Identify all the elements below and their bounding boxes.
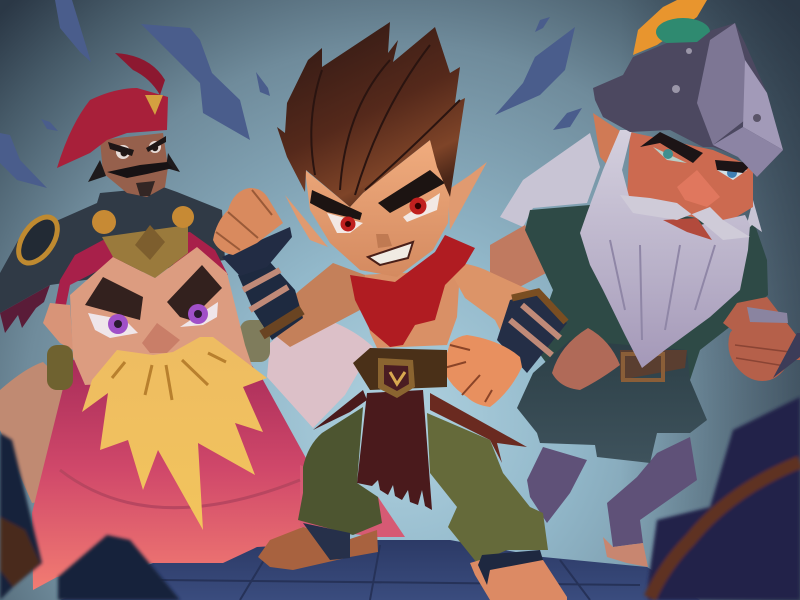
character: pink giant (0, 206, 405, 590)
left fist (213, 188, 283, 255)
gauntlet (747, 307, 788, 323)
brows (640, 132, 703, 163)
beard (82, 337, 267, 530)
right bracer (497, 293, 567, 373)
left fist (552, 328, 620, 390)
hair (277, 22, 465, 207)
belt (620, 350, 687, 380)
cape fringe (0, 285, 50, 333)
nose (376, 234, 392, 248)
left upper arm (262, 263, 365, 347)
robe arc (60, 470, 300, 508)
right strap (478, 550, 543, 585)
brows (108, 136, 166, 156)
gold ring (11, 210, 65, 270)
robe tail (300, 465, 405, 537)
skirt (517, 340, 707, 463)
helmet (593, 23, 783, 177)
beard (580, 130, 750, 368)
character: hat man (0, 53, 225, 333)
right fist (443, 335, 522, 407)
hat (57, 88, 168, 168)
robe (32, 350, 307, 590)
face (100, 133, 168, 197)
mustache (107, 162, 173, 178)
helmet side plate (743, 60, 783, 150)
right pants (427, 413, 548, 563)
wrist band (773, 333, 800, 378)
ears (285, 195, 328, 247)
buckle (378, 358, 415, 398)
back hair (500, 133, 600, 227)
right arm (723, 297, 800, 360)
face (305, 140, 450, 277)
eyes (653, 147, 687, 163)
loincloth (357, 390, 432, 510)
plume base (656, 18, 710, 46)
rooftop floor (60, 540, 700, 600)
feather (115, 53, 165, 95)
side hair (88, 153, 180, 182)
mouth (663, 218, 712, 240)
right fist (728, 310, 794, 381)
right arm (445, 262, 540, 350)
left bracer (238, 262, 303, 340)
left glove (222, 227, 292, 276)
foreground left silhouette (0, 433, 180, 600)
side flaps (313, 390, 367, 430)
torso (360, 270, 460, 348)
left pants (298, 407, 382, 535)
helmet crest (697, 23, 745, 145)
cape (0, 187, 225, 313)
right hair (745, 200, 762, 232)
right foot (470, 557, 567, 600)
eyes (88, 313, 138, 338)
buckle letter (390, 372, 405, 384)
legs (527, 447, 587, 523)
face (627, 132, 753, 225)
left foot (258, 527, 378, 570)
left arm (0, 362, 72, 503)
crown (102, 225, 188, 278)
belt (353, 348, 447, 390)
ear (43, 303, 73, 350)
eyes (116, 145, 130, 159)
left arm (490, 225, 548, 305)
character: center boy (213, 22, 567, 600)
jewel (145, 95, 163, 115)
face (70, 247, 255, 385)
hair strands (311, 45, 460, 195)
foot (603, 537, 648, 567)
foreground right silhouette (647, 397, 800, 600)
left strap (303, 523, 350, 560)
eyes (327, 213, 363, 233)
nose (677, 170, 720, 207)
tunic (525, 205, 768, 380)
right earring (240, 320, 270, 362)
character: old warrior (490, 0, 800, 567)
beard strands (610, 240, 715, 340)
plume (633, 0, 707, 55)
buckle (623, 354, 663, 380)
floating shards (0, 0, 582, 188)
goatee (136, 181, 155, 196)
headband (55, 232, 228, 310)
wing (267, 320, 373, 428)
brows (85, 277, 143, 320)
mustache (620, 195, 750, 240)
scarf (350, 235, 475, 347)
nose (142, 323, 180, 353)
ear (593, 113, 623, 170)
left earring (47, 345, 73, 390)
brows (310, 190, 362, 220)
mouth (368, 242, 413, 265)
helmet front plate (713, 127, 783, 177)
